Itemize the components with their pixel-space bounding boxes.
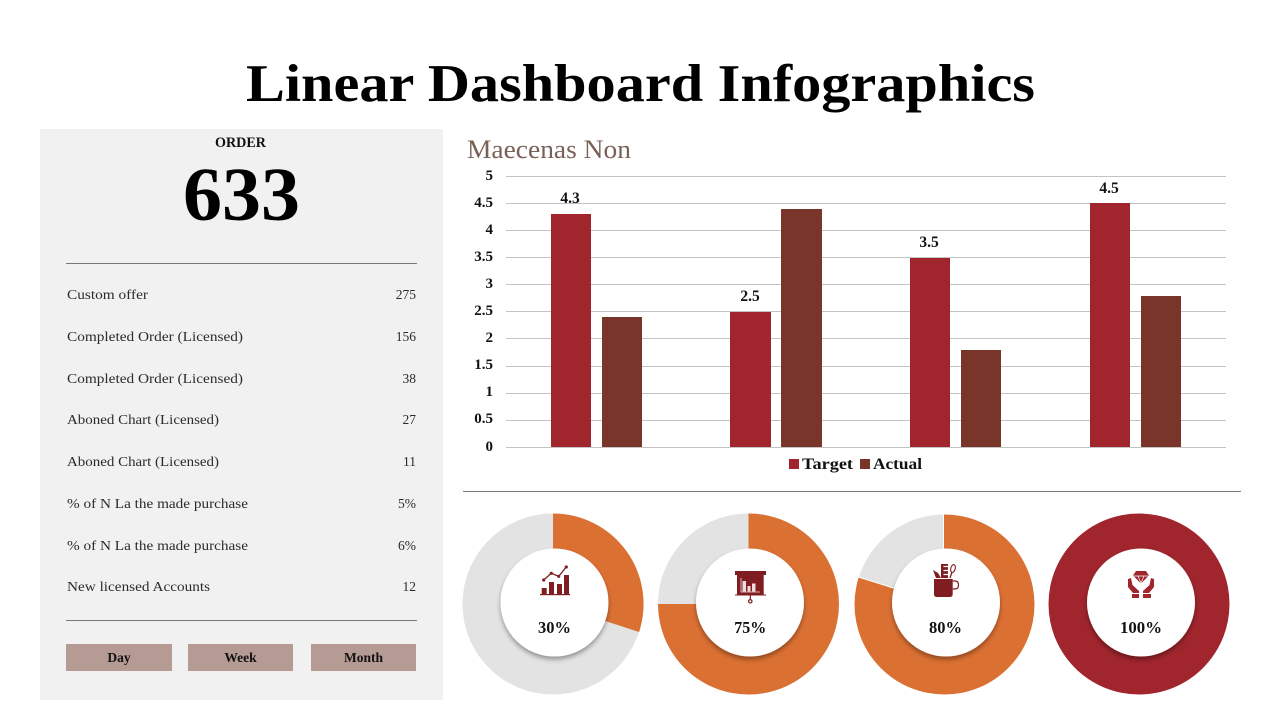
order rows: Aboned Chart (Licensed) (67, 412, 219, 427)
value: 100% (1120, 618, 1162, 637)
order rows: 5% (398, 496, 416, 511)
chart heading: Maecenas Non (467, 135, 631, 164)
order rows: 6% (398, 538, 416, 553)
value: 30% (538, 618, 571, 637)
bars: group 3: 3.5 (919, 234, 939, 251)
button: month (311, 644, 416, 671)
order rows: 27 (402, 412, 416, 427)
order rows: New licensed Accounts (67, 579, 210, 594)
order rows: 275 (396, 287, 416, 302)
order rows: 156 (396, 329, 416, 344)
donut: 80% (854, 514, 1034, 694)
legend: Target (802, 456, 854, 473)
order rows: % of N La the made purchase (67, 496, 248, 511)
y axis labels: 5 (486, 168, 493, 184)
donut: 100% (1048, 514, 1230, 694)
icon: hands holding diamond (1128, 571, 1154, 598)
bar chart (474, 168, 1226, 473)
y axis labels: 4.5 (474, 195, 493, 211)
order rows: 12 (402, 579, 416, 594)
y axis labels: 1 (486, 384, 493, 400)
value: 75% (734, 618, 766, 637)
bars: group 3 (910, 234, 1001, 447)
y axis labels (474, 168, 494, 455)
button: week (188, 644, 293, 671)
panel: order summary (40, 129, 443, 700)
order total: 633 (183, 153, 300, 237)
order rows: Completed Order (Licensed) (67, 371, 243, 386)
button: month: Month (344, 650, 383, 665)
order rows (67, 287, 416, 594)
title: Linear Dashboard Infographics (246, 55, 1035, 113)
legend: Actual (873, 456, 923, 473)
y axis labels: 3.5 (474, 249, 493, 265)
order label: ORDER (215, 135, 266, 151)
y axis labels: 2.5 (474, 303, 493, 319)
order rows: % of N La the made purchase (67, 538, 248, 553)
button: day: Day (107, 650, 131, 665)
bars: group 4: 4.5 (1099, 180, 1119, 197)
bars: group 4 (1090, 180, 1181, 447)
donut: 30% (462, 514, 644, 694)
bars: group 1: 4.3 (560, 190, 580, 207)
value: 80% (929, 618, 962, 637)
icon: presentation board (735, 571, 766, 603)
order rows: Custom offer (67, 287, 149, 302)
bars: group 1 (551, 190, 642, 447)
order rows: Aboned Chart (Licensed) (67, 454, 219, 469)
y axis labels: 4 (486, 222, 494, 238)
y axis labels: 3 (486, 276, 493, 292)
icon: mug with tools (933, 564, 958, 597)
y axis labels: 2 (486, 330, 493, 346)
bars: group 2 (730, 209, 822, 447)
legend (789, 456, 923, 473)
button: week: Week (224, 650, 257, 665)
button: day (66, 644, 172, 671)
bars: group 2: 2.5 (740, 288, 760, 305)
y axis labels: 0 (486, 439, 493, 455)
order rows: Completed Order (Licensed) (67, 329, 243, 344)
order rows: 11 (403, 454, 416, 469)
y axis labels: 1.5 (474, 357, 493, 373)
y axis labels: 0.5 (474, 411, 493, 427)
order rows: 38 (402, 371, 416, 386)
icon: growth chart (540, 565, 570, 595)
donut: 75% (658, 514, 839, 694)
